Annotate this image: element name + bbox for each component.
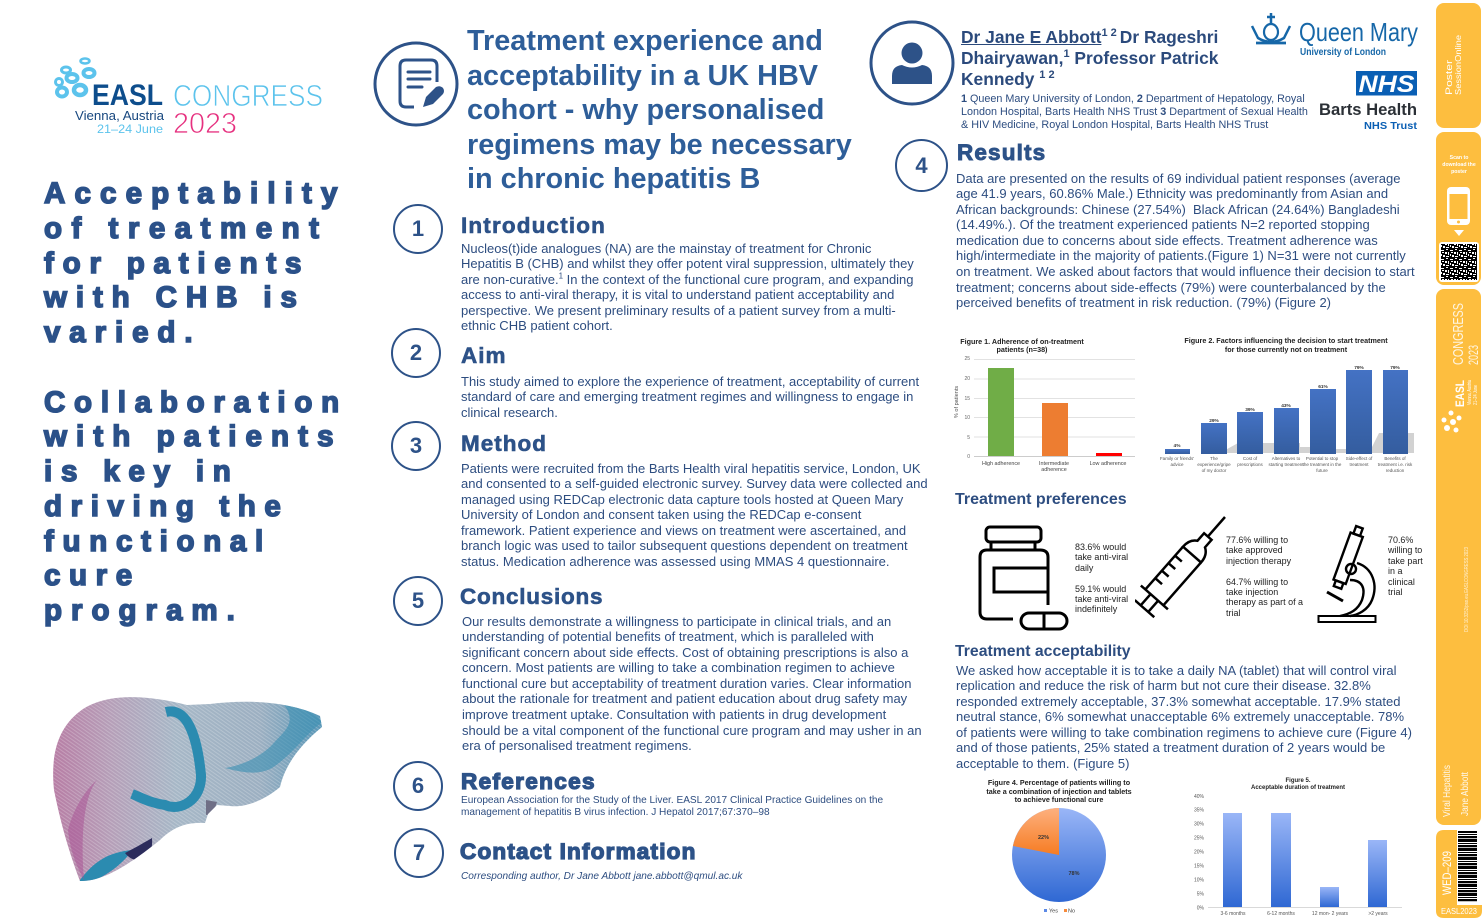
chart: Figure 5 duration: 0% xyxy=(1197,906,1205,912)
chart: Figure 5 duration xyxy=(1194,778,1402,917)
text: Method: Patients were recruited from the Barts Health viral hepatitis service, London, UK xyxy=(461,460,921,476)
chart: Figure 4 pie: Yes xyxy=(1049,908,1058,914)
text: Treatment acceptability: neutral stance, 6% somewhat unacceptable 6% extremely unacceptable. 78% xyxy=(956,709,1404,724)
text: daily and indefinite use: 59.1% would xyxy=(1075,584,1126,594)
chart: Figure 1 adherence: patients (n=38) xyxy=(997,345,1048,354)
logo: Queen Mary University of London xyxy=(1250,13,1418,58)
chart: Figure 2 factors: advice xyxy=(1170,462,1184,467)
text: Results: Data are presented on the results of 69 individual patient responses (average xyxy=(956,170,1400,186)
text: clinical trial: trial xyxy=(1388,587,1402,597)
headline: key messages: driving the xyxy=(44,490,289,523)
sidebar: congress and topic xyxy=(1436,289,1481,825)
heading: Results: Results xyxy=(957,140,1046,165)
text: clinical trial: 70.6% xyxy=(1388,535,1413,545)
text: Results: on treatment. We asked about factors that would influence their decision to start xyxy=(956,264,1415,279)
text: clinical trial: take part xyxy=(1388,556,1423,566)
text: Method: branch logic was used to tailor subsequent questions dependent on treatment xyxy=(461,538,908,553)
chart: Figure 5 duration: Acceptable duration of treatment xyxy=(1251,785,1345,791)
text: Introduction: Nucleos(t)ide analogues (NA) are the mainstay of treatment for Chronic xyxy=(461,240,871,256)
chart: Figure 2 factors: 79% xyxy=(1390,365,1401,371)
text: clinical trial: in a xyxy=(1388,566,1402,576)
text: injection therapy: therapy as part of a xyxy=(1226,597,1303,607)
affiliations: 1 Queen Mary University of London, 2 Department of Hepatology, Royal xyxy=(961,92,1305,104)
phone and QR code: Scan to xyxy=(1450,155,1468,161)
headline: key messages: Acceptability xyxy=(44,177,347,210)
text: clinical trial: willing to xyxy=(1388,545,1422,555)
chart: Figure 2 factors: starting treatment xyxy=(1268,462,1304,467)
sidebar rotated labels: Viral Hepatitis xyxy=(1441,765,1453,817)
number badge 6: 6 xyxy=(412,773,424,798)
text: Conclusions: improve treatment uptake. Consultation with patients in drug development xyxy=(462,707,886,722)
text: Introduction: Hepatitis B (CHB) and whilst they offer potent viral suppression, ultimately they xyxy=(461,256,914,271)
headline: key messages: of treatment xyxy=(44,212,328,245)
text: References: European Association for the Study of the Liver. EASL 2017 Clinical Practice Guidelines on the xyxy=(461,794,883,806)
number badge 3: 3 xyxy=(410,433,422,458)
headline: key messages: with patients xyxy=(44,420,343,453)
chart: Figure 1 adherence: Figure 1. Adherence of on-treatment xyxy=(960,337,1084,346)
text: Method: framework. Patient experience and views on treatment were ascertained, and xyxy=(461,523,906,538)
chart: Figure 2 factors: experience/gripe xyxy=(1197,462,1231,467)
text: clinical trial xyxy=(1388,535,1423,597)
chart: Figure 4 pie: Figure 4. Percentage of patients willing to xyxy=(988,778,1131,787)
chart: Figure 5 duration: 40% xyxy=(1194,794,1205,800)
text: Introduction: are non-curative.1 In the context of the functional cure program, and expanding xyxy=(461,271,914,287)
text: Treatment acceptability: We asked how acceptable it is to take a daily NA (tablet) that will control viral xyxy=(956,662,1397,678)
logo: Queen Mary University of London: University of London xyxy=(1300,46,1386,58)
text: Conclusions: should be a vital component of the functional cure program and may usher in an xyxy=(462,723,922,738)
chart: Figure 2 factors: treatment xyxy=(1349,462,1369,467)
heading: References: References xyxy=(461,769,596,794)
affiliations xyxy=(961,92,1308,130)
chart: Figure 2 factors: Alternatives to xyxy=(1272,456,1301,461)
authors: Dhairyawan,1 Professor Patrick xyxy=(961,48,1218,68)
sidebar rotated labels: Vienna, Austria xyxy=(1467,380,1473,405)
text: daily and indefinite use: indefinitely xyxy=(1075,604,1117,614)
chart: Figure 4 pie xyxy=(986,778,1132,914)
logo: EASL Congress 2023: 21–24 June xyxy=(97,122,163,136)
sidebar: poster number and barcode: EASL2023 xyxy=(1441,907,1478,916)
phone and QR code: poster xyxy=(1451,169,1467,175)
text: daily and indefinite use: take anti-viral xyxy=(1075,594,1128,604)
text: Method xyxy=(461,460,928,569)
chart: Figure 1 adherence: % of patients xyxy=(954,386,960,418)
text: Results: (14.49%.). Of the treatment experienced patients N=2 reported stopping xyxy=(956,217,1370,232)
text: Results: treatment; concerns about side-effects (79%) were counterbalanced by the xyxy=(956,280,1386,295)
number badge 3 xyxy=(391,421,441,471)
text: Conclusions: about the rationale for treatment and patient education about drug safety may xyxy=(462,691,907,706)
number badge 4: 4 xyxy=(915,153,928,178)
sidebar logo text: SessionOnline xyxy=(1454,34,1463,95)
chart: Figure 1 adherence: 25 xyxy=(964,356,970,362)
chart: Figure 4 pie: take a combination of injection and tablets xyxy=(986,787,1132,796)
text: Treatment acceptability: of patients were willing to take combination regimens to achieve cure (Figure 4) xyxy=(956,725,1412,740)
headline: key messages: varied. xyxy=(44,316,201,349)
number badge 7: 7 xyxy=(413,840,425,865)
text: Treatment acceptability: responded extremely acceptable, 37.3% somewhat acceptable. 17.9% stated xyxy=(956,694,1400,709)
chart: Figure 2 factors: Potential to stop xyxy=(1306,456,1339,461)
text: Method: status. Medication adherence was assessed using MMAS 4 questionnaire. xyxy=(461,554,890,569)
logo: NHS Barts Health xyxy=(1319,71,1418,132)
chart: Figure 2 factors: for those currently not on treatment xyxy=(1225,345,1348,354)
icon: person xyxy=(870,20,954,106)
text: injection therapy xyxy=(1226,535,1303,618)
affiliations: London Hospital, Barts Health NHS Trust 3 Department of Sexual Health xyxy=(961,106,1308,118)
heading: Treatment preferences: Treatment preferences xyxy=(955,491,1127,508)
affiliations: & HIV Medicine, Royal London Hospital, Barts Health NHS Trust xyxy=(961,118,1268,130)
chart: Figure 5 duration: 3-6 months xyxy=(1220,911,1246,917)
number badge 7 xyxy=(394,828,444,878)
chart: Figure 1 adherence: Low adherence xyxy=(1090,461,1126,467)
logo: NHS Barts Health: Barts Health xyxy=(1319,101,1417,119)
chart: Figure 5 duration: >2 years xyxy=(1368,911,1388,917)
text: injection therapy: trial xyxy=(1226,608,1240,618)
chart: Figure 2 factors: Cost of xyxy=(1243,456,1258,461)
logo: EASL Congress 2023: EASL xyxy=(92,79,163,112)
sidebar rotated labels: DOI 10.3252/pso.eu.EASLCONGRESS.2023 xyxy=(1464,547,1470,632)
sidebar: poster number and barcode: WED–209 xyxy=(1440,851,1454,895)
chart: Figure 5 duration: 20% xyxy=(1194,850,1205,856)
headline: key messages xyxy=(42,177,348,627)
chart: Figure 1 adherence: 20 xyxy=(964,376,970,382)
headline: key messages: is key in xyxy=(44,455,240,488)
chart: Figure 1 adherence: 10 xyxy=(964,415,970,421)
text: injection therapy: 64.7% willing to xyxy=(1226,577,1288,587)
chart: Figure 5 duration: 35% xyxy=(1194,808,1205,814)
chart: Figure 2 factors: The xyxy=(1210,456,1218,461)
text: Conclusions: era of personalised treatment regimens. xyxy=(462,738,692,753)
text: injection therapy: injection therapy xyxy=(1226,556,1291,566)
chart: Figure 2 factors: the treatment in the xyxy=(1303,462,1342,467)
chart: Figure 1 adherence: 15 xyxy=(964,396,970,402)
heading: Method: Method xyxy=(461,431,547,456)
text: Treatment acceptability: acceptable to them. (Figure 5) xyxy=(956,756,1129,771)
sidebar: scan to download xyxy=(1436,132,1481,285)
chart: Figure 1 adherence: adherence xyxy=(1041,467,1067,473)
text: Conclusions xyxy=(462,614,922,753)
title: cohort - why personalised xyxy=(467,94,824,126)
chart: Figure 2 factors: 39% xyxy=(1245,407,1256,413)
chart: Figure 2 factors: 29% xyxy=(1209,418,1220,424)
chart: Figure 2 factors: 79% xyxy=(1354,365,1365,371)
chart: Figure 5 duration: 10% xyxy=(1194,878,1205,884)
headline: key messages: for patients xyxy=(44,246,310,280)
number badge 5 xyxy=(393,576,443,626)
chart: Figure 2 factors: 4% xyxy=(1174,443,1181,449)
chart: Figure 2 factors: Side-effect of xyxy=(1346,456,1373,461)
logo: EASL Congress 2023 xyxy=(54,57,323,140)
chart: Figure 2 factors: reduction xyxy=(1386,468,1405,473)
sidebar logo text xyxy=(1444,34,1463,95)
sidebar rotated labels: 2023 xyxy=(1465,345,1481,365)
text: daily and indefinite use: daily xyxy=(1075,563,1093,573)
text: injection therapy: 77.6% willing to xyxy=(1226,535,1288,545)
sidebar rotated labels: EASL xyxy=(1453,380,1467,407)
heading: Introduction: Introduction xyxy=(461,213,606,238)
text: Treatment acceptability: replication and reduce the risk of harm but not cure their disease. 32.8% xyxy=(956,678,1371,693)
text: Results: perceived benefits of treatment in risk reduction. (79%) (Figure 2) xyxy=(956,295,1331,310)
text: Conclusions: understanding of potential benefits of treatment, which is paralleled with xyxy=(462,629,874,644)
illustration: liver xyxy=(53,697,322,881)
text: Results: African backgrounds: Chinese (27.54%) Black African (24.64%) Bangladeshi xyxy=(956,202,1400,217)
text: Results: age 41.9 years, 60.86% Male.) Ethnicity was predominantly from Asian and xyxy=(956,186,1388,201)
chart: Figure 1 adherence xyxy=(954,337,1135,473)
authors: Dr Jane E Abbott1 2 Dr Rageshri xyxy=(961,27,1218,47)
text: Conclusions: significant concern about side effects. Cost of obtaining prescriptions is also a xyxy=(462,645,908,660)
logo: NHS Barts Health: NHS Trust xyxy=(1364,120,1418,132)
text: daily and indefinite use xyxy=(1075,542,1128,614)
icon: document and pen xyxy=(374,42,458,126)
text: References: management of hepatitis B virus infection. J Hepatol 2017;67:370–98 xyxy=(461,807,770,818)
chart: Figure 1 adherence: High adherence xyxy=(982,461,1020,467)
number badge 4 xyxy=(895,139,948,192)
chart: Figure 2 factors: Benefits of xyxy=(1384,456,1406,461)
chart: Figure 4 pie: No xyxy=(1068,908,1075,914)
number badge 2 xyxy=(391,328,441,378)
title: regimens may be necessary xyxy=(467,129,852,161)
text: Treatment acceptability: and of those patients, 25% stated a treatment duration of 2 years would be xyxy=(956,740,1385,755)
chart: Figure 2 factors: prescriptions xyxy=(1237,462,1264,467)
chart: Figure 4 pie: to achieve functional cure xyxy=(1015,795,1103,804)
chart: Figure 2 factors: future xyxy=(1316,468,1328,473)
chart: Figure 1 adherence: Intermediate xyxy=(1039,461,1069,467)
text: Introduction: perspective. We present preliminary results of a patient survey from a multi- xyxy=(461,303,896,318)
logo: NHS Barts Health: NHS xyxy=(1358,71,1414,98)
chart: Figure 1 adherence: 0 xyxy=(967,454,970,460)
chart: Figure 1 adherence: 5 xyxy=(967,435,970,441)
text: Method: and consented to a self-guided electronic survey. Survey data were collected and xyxy=(461,476,928,491)
text: Results: high/intermediate in the majority of patients.(Figure 1) N=31 were not currently xyxy=(956,248,1406,263)
text: Results: medication due to concerns about side effects. Treatment adherence was xyxy=(956,233,1378,248)
authors xyxy=(961,27,1218,89)
text: Conclusions: Our results demonstrate a willingness to participate in clinical trials, and an xyxy=(462,614,891,628)
text: Method: managed using REDCap electronic data capture tools hosted at Queen Mary xyxy=(461,492,903,507)
chart: Figure 5 duration: 25% xyxy=(1194,836,1205,842)
number badge 5: 5 xyxy=(412,588,424,613)
sidebar rotated labels: 21–24 June xyxy=(1473,385,1479,405)
number badge 6 xyxy=(393,761,443,811)
chart: Figure 5 duration: 15% xyxy=(1194,864,1205,870)
chart: Figure 2 factors: 61% xyxy=(1318,384,1329,390)
headline: key messages: Collaboration xyxy=(44,386,348,418)
heading: Aim: Aim xyxy=(461,343,507,368)
sidebar: poster number and barcode xyxy=(1436,830,1482,918)
text: contact: Corresponding author, Dr Jane Abbott jane.abbott@qmul.ac.uk xyxy=(461,871,742,882)
title xyxy=(467,25,852,195)
chart: Figure 2 factors: Family or friends' xyxy=(1160,456,1194,461)
chart: Figure 2 factors: Figure 2. Factors influencing the decision to start treatment xyxy=(1184,336,1388,345)
text: Method: University of London and consent taken using the REDCap e-consent xyxy=(461,507,861,522)
phone and QR code xyxy=(1439,155,1479,282)
logo: EASL Congress 2023: Vienna, Austria xyxy=(75,108,165,123)
text: daily and indefinite use: 83.6% would xyxy=(1075,542,1126,552)
sidebar logo text: Poster xyxy=(1444,60,1454,95)
text: Introduction: ethnic CHB patient cohort. xyxy=(461,318,613,333)
text: Treatment acceptability xyxy=(956,662,1412,771)
chart: Figure 5 duration: 6-12 months xyxy=(1267,911,1295,917)
text: daily and indefinite use: take anti-viral xyxy=(1075,552,1128,562)
authors: Kennedy 1 2 xyxy=(961,69,1055,89)
chart: Figure 2 factors: treatment i.e. risk xyxy=(1378,462,1413,467)
text: Aim: clinical research. xyxy=(461,405,558,420)
chart: Figure 4 pie: 22% xyxy=(1038,835,1049,841)
text: Conclusions: functional cure but acceptability of treatment duration varies. Clear information xyxy=(462,676,911,691)
icon: microscope xyxy=(1318,524,1376,623)
sidebar: poster session online xyxy=(1436,3,1481,128)
headline: key messages: with CHB is xyxy=(44,281,306,314)
title: Treatment experience and xyxy=(467,25,823,57)
number badge 2: 2 xyxy=(410,340,422,365)
text: Introduction: access to anti-viral therapy, it is vital to understand patient acceptability and xyxy=(461,287,894,302)
chart: Figure 2 factors: of my doctor xyxy=(1202,468,1227,473)
text: Conclusions: concern. Most patients are willing to take a combination regimen to achieve xyxy=(462,660,895,675)
heading: Treatment acceptability: Treatment acceptability xyxy=(955,643,1131,660)
heading: Conclusions: Conclusions xyxy=(460,584,603,609)
title: acceptability in a UK HBV xyxy=(467,60,818,92)
number badge 1: 1 xyxy=(412,216,424,241)
text: References xyxy=(461,794,883,818)
icon: pill bottle xyxy=(978,526,1068,630)
sidebar rotated labels: Jane Abbott xyxy=(1459,772,1471,816)
phone and QR code: download the xyxy=(1442,162,1476,168)
text: injection therapy: take injection xyxy=(1226,587,1278,597)
chart: Figure 2 factors: 43% xyxy=(1281,403,1292,409)
text: Aim: This study aimed to explore the experience of treatment, acceptability of current xyxy=(461,374,919,388)
sidebar rotated labels xyxy=(1441,303,1481,817)
text: Results xyxy=(956,170,1415,310)
headline: key messages: cure xyxy=(44,559,141,592)
chart: Figure 5 duration: 5% xyxy=(1197,892,1205,898)
logo: EASL Congress 2023: 2023 xyxy=(173,108,237,140)
heading: Contact Information: Contact Information xyxy=(460,839,697,864)
number badge 1 xyxy=(393,204,443,254)
text: Aim: standard of care and emerging treatment regimes and willingness to engage in xyxy=(461,389,913,404)
chart: Figure 2 factors xyxy=(1160,336,1414,473)
chart: Figure 5 duration: 12 mon- 2 years xyxy=(1312,911,1349,917)
text: injection therapy: take approved xyxy=(1226,545,1283,555)
chart: Figure 4 pie: 78% xyxy=(1068,871,1080,877)
text: Introduction xyxy=(461,240,914,333)
chart: Figure 5 duration: Figure 5. xyxy=(1285,778,1311,784)
title: in chronic hepatitis B xyxy=(467,163,760,195)
chart: Figure 5 duration: 30% xyxy=(1194,822,1205,828)
headline: key messages: program. xyxy=(44,594,244,627)
text: Aim xyxy=(461,374,919,420)
headline: key messages: functional xyxy=(44,524,272,558)
icon: syringe xyxy=(1135,516,1226,618)
text: clinical trial: clinical xyxy=(1388,577,1415,587)
